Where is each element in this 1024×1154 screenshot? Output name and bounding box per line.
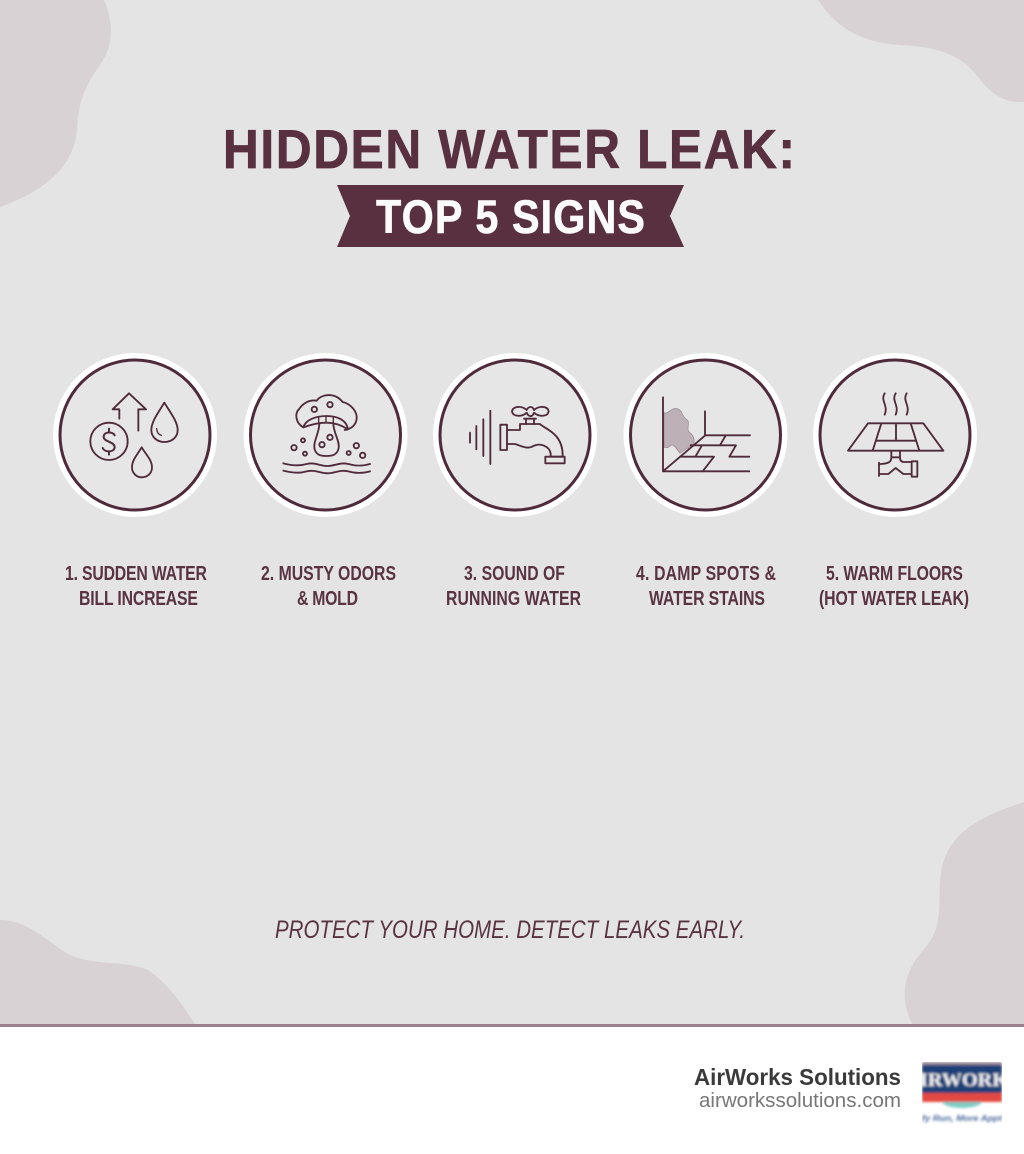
- label 4: 4. DAMP SPOTS &: [636, 562, 776, 584]
- label 4: [636, 562, 776, 609]
- label 3: RUNNING WATER: [446, 587, 581, 609]
- blob: top right: [818, 0, 1024, 102]
- sign 5: circle icon, warm floor: [813, 353, 977, 517]
- logo: IRWORK: [920, 1070, 1008, 1091]
- label 1: [65, 562, 207, 609]
- sign 4: circle icon, damp wall and floor: [624, 353, 788, 517]
- label 5: 5. WARM FLOORS: [826, 562, 963, 584]
- blob: top left: [0, 0, 111, 207]
- label 2: 2. MUSTY ODORS: [261, 562, 396, 584]
- label 5: [819, 562, 969, 609]
- blob: bottom right: [905, 802, 1024, 1024]
- footer brand name: AirWorks Solutions: [694, 1064, 901, 1090]
- sign 2: circle icon, mushroom: [244, 353, 408, 517]
- title: HIDDEN WATER LEAK:: [223, 120, 795, 181]
- label 2: & MOLD: [297, 587, 358, 609]
- subtitle ribbon: TOP 5 SIGNS: [376, 192, 645, 244]
- label 1: BILL INCREASE: [79, 587, 198, 609]
- label 1: 1. SUDDEN WATER: [65, 562, 207, 584]
- blob: bottom left: [0, 920, 195, 1024]
- label 4: WATER STAINS: [649, 587, 765, 609]
- footer url: airworkssolutions.com: [699, 1090, 901, 1112]
- logo: [920, 1062, 1008, 1124]
- subtitle ribbon: [337, 185, 684, 247]
- label 2: [261, 562, 396, 609]
- sign 3: circle icon, faucet: [433, 353, 597, 517]
- tagline: PROTECT YOUR HOME. DETECT LEAKS EARLY.: [275, 915, 745, 943]
- logo: fy Run, More Appt: [922, 1114, 1002, 1123]
- label 5: (HOT WATER LEAK): [819, 587, 969, 609]
- label 3: [446, 562, 581, 609]
- footer: [0, 1024, 1024, 1154]
- label 3: 3. SOUND OF: [464, 562, 565, 584]
- sign 1: circle icon, bill increase: [53, 353, 217, 517]
